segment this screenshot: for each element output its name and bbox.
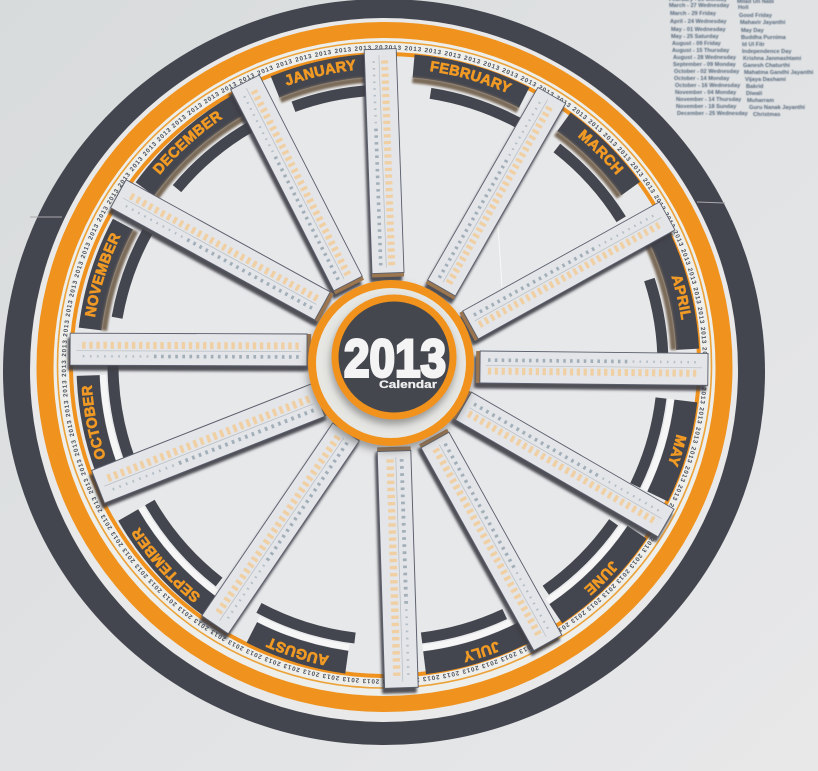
holiday list: Diwali [746,91,763,97]
holiday list: October - 14 Monday [674,76,730,82]
holiday list: October - 02 Wednesday [674,69,740,75]
ring of repeated year text: 2013 2013 2013 2013 2013 2013 2013 2013 2013 2013 2013 2013 2013 2013 2013 2013 2013 2013 2013 2013 2013 2013 2013 2013 2013 2013 2013 2013 2013 2013 2013 2013 2013 2013 2013 2013 2013 2013 2013 2013 2013 2013 2013 2013 2013 2013 2013 2013 2013 2013 2013 2013 2013 2013 2013 2013 2013 2013 2013 2013 2013 2013 2013 2013 2013 2013 2013 2013 2013 2013 2013 2013 2013 2013 2013 2013 2013 2013 2013 2013 2013 2013 2013 2013 2013 2013 2013 2013 2013 2013 2013 2013 2013 2013 2013 2013 2013 2013 2013 2013 [62,45,708,684]
strip: October [70,333,311,366]
month: November: NOVEMBER [84,233,121,318]
month: April: APRIL [671,276,691,320]
strip: September [92,382,329,503]
holiday list: May - 01 Wednesday [671,27,727,33]
holiday list: Holi [738,5,749,11]
holiday list: November - 04 Monday [675,90,737,96]
holiday list: Buddha Purnima [741,35,787,41]
month: July: JULY [464,642,498,663]
holiday list [669,0,814,118]
month: June: JUNE [584,561,618,596]
strip: January [231,75,364,294]
holiday list: December - 25 Wednesday [677,111,749,117]
holiday list: August - 28 Wednesday [673,55,737,61]
strip: February [426,87,566,299]
month: October: OCTOBER [82,384,105,460]
holiday list: Vijaya Dashami [745,77,786,83]
holiday list: March - 29 Friday [670,11,717,17]
holiday list: Ganesh Chaturthi [743,63,790,69]
holiday list: Mahavir Jayanthi [740,20,786,26]
holiday list: August - 09 Friday [672,41,722,47]
holiday list: Good Friday [739,13,773,19]
holiday list: Guru Nanak Jayanthi [749,105,805,111]
holiday list: Muharram [747,98,774,104]
strip: June [419,429,562,651]
strip: November [111,180,334,322]
holiday list: November - 14 Thursday [676,97,742,103]
month: February: FEBRUARY [430,60,513,92]
year title: 2013 [344,330,446,388]
holiday list: August - 15 Thursday [672,48,730,54]
holiday list: May Day [741,28,765,34]
holiday list: March - 27 Wednesday [669,3,730,9]
holiday list: Mahatma Gandhi Jayanthi [744,70,814,76]
strip: August [202,420,362,634]
month: December: DECEMBER [152,111,224,175]
strip: May [452,390,674,537]
calendar strips [70,49,708,688]
holiday list: October - 16 Wednesday [675,83,741,89]
month: January: JANUARY [286,59,356,86]
strip: March [459,202,675,341]
holiday list: Christmas [753,112,780,118]
hub ring [312,284,470,442]
calendar subtitle: Calendar [379,379,438,391]
month: September: SEPTEMBER [132,526,200,602]
month: March: MARCH [578,128,624,175]
holiday list: November - 18 Sunday [676,104,737,110]
holiday list: Bakrid [746,84,764,90]
holiday list: Independence Day [742,49,792,55]
holiday list: April - 24 Wednesday [670,19,727,25]
holiday list: September - 09 Monday [673,62,737,68]
month: August: AUGUST [265,638,330,666]
strip: July [377,446,418,688]
holiday list: Id Ul Fitr [742,42,766,48]
holiday list: Krishna Janmashtami [743,56,802,62]
strip: April [476,351,708,385]
center hub [312,284,470,442]
strip: top [364,49,404,277]
hub disc [335,298,453,416]
month: May: MAY [668,434,687,468]
holiday list: May - 25 Saturday [671,34,719,40]
